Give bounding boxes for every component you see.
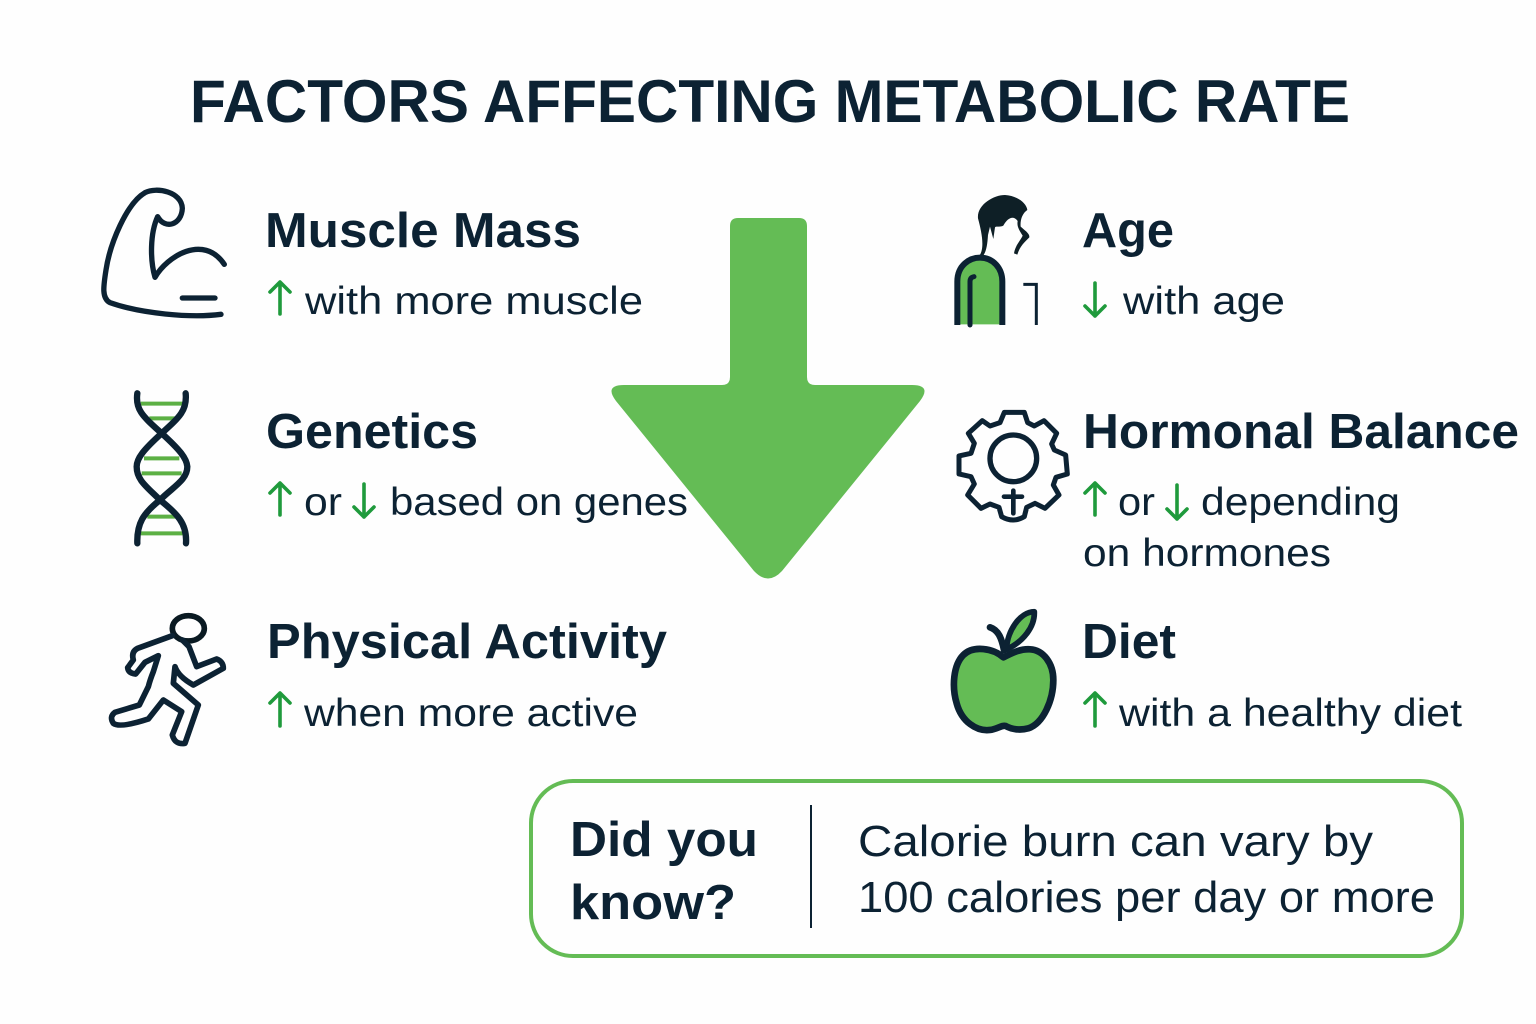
up arrow: [270, 282, 290, 314]
text: when more active: when more active: [303, 692, 638, 735]
text: based on genes: based on genes: [390, 481, 688, 524]
icon: running person: [112, 616, 223, 744]
down arrow: [1167, 485, 1187, 519]
panel: age: [957, 195, 1285, 325]
heading: muscle mass: Muscle Mass: [265, 204, 581, 258]
heading: genetics: Genetics: [266, 405, 478, 459]
icon: apple: [954, 612, 1053, 730]
text: with age: with age: [1122, 280, 1285, 323]
callout heading: Did you: [570, 813, 758, 867]
down arrow: [354, 484, 374, 517]
icon: person profile: [957, 195, 1036, 325]
panel: hormonal balance: [959, 405, 1519, 575]
icon: gear with gender symbol: [959, 412, 1067, 520]
panel: physical activity: [112, 615, 667, 744]
panel: muscle mass: [104, 190, 643, 323]
text: with a healthy diet: with a healthy diet: [1118, 692, 1462, 735]
central green down arrow: [612, 218, 924, 578]
up arrow: [1085, 693, 1105, 726]
panel: genetics: [137, 393, 688, 543]
text: or: or: [1118, 481, 1155, 524]
up arrow: [1085, 483, 1105, 515]
down arrow: [1085, 283, 1105, 316]
heading: age: Age: [1082, 204, 1174, 258]
heading: diet: Diet: [1082, 615, 1176, 669]
panel: diet: [954, 612, 1462, 735]
heading: hormonal balance: Hormonal Balance: [1083, 405, 1519, 459]
callout border: [531, 781, 1462, 956]
callout text: Calorie burn can vary by: [858, 817, 1373, 866]
callout heading: know?: [570, 876, 736, 930]
text: depending: depending: [1201, 481, 1400, 524]
callout text: 100 calories per day or more: [858, 873, 1435, 922]
up arrow: [270, 693, 290, 726]
text: with more muscle: with more muscle: [304, 280, 643, 323]
heading: physical activity: Physical Activity: [267, 615, 667, 669]
up arrow: [270, 483, 290, 515]
text: on hormones: on hormones: [1083, 532, 1331, 575]
title: FACTORS AFFECTING METABOLIC RATE: [190, 68, 1350, 135]
icon: DNA helix: [137, 393, 187, 543]
callout: did you know: [531, 781, 1462, 956]
text: or: or: [304, 481, 342, 524]
icon: flexed arm: [104, 190, 224, 316]
